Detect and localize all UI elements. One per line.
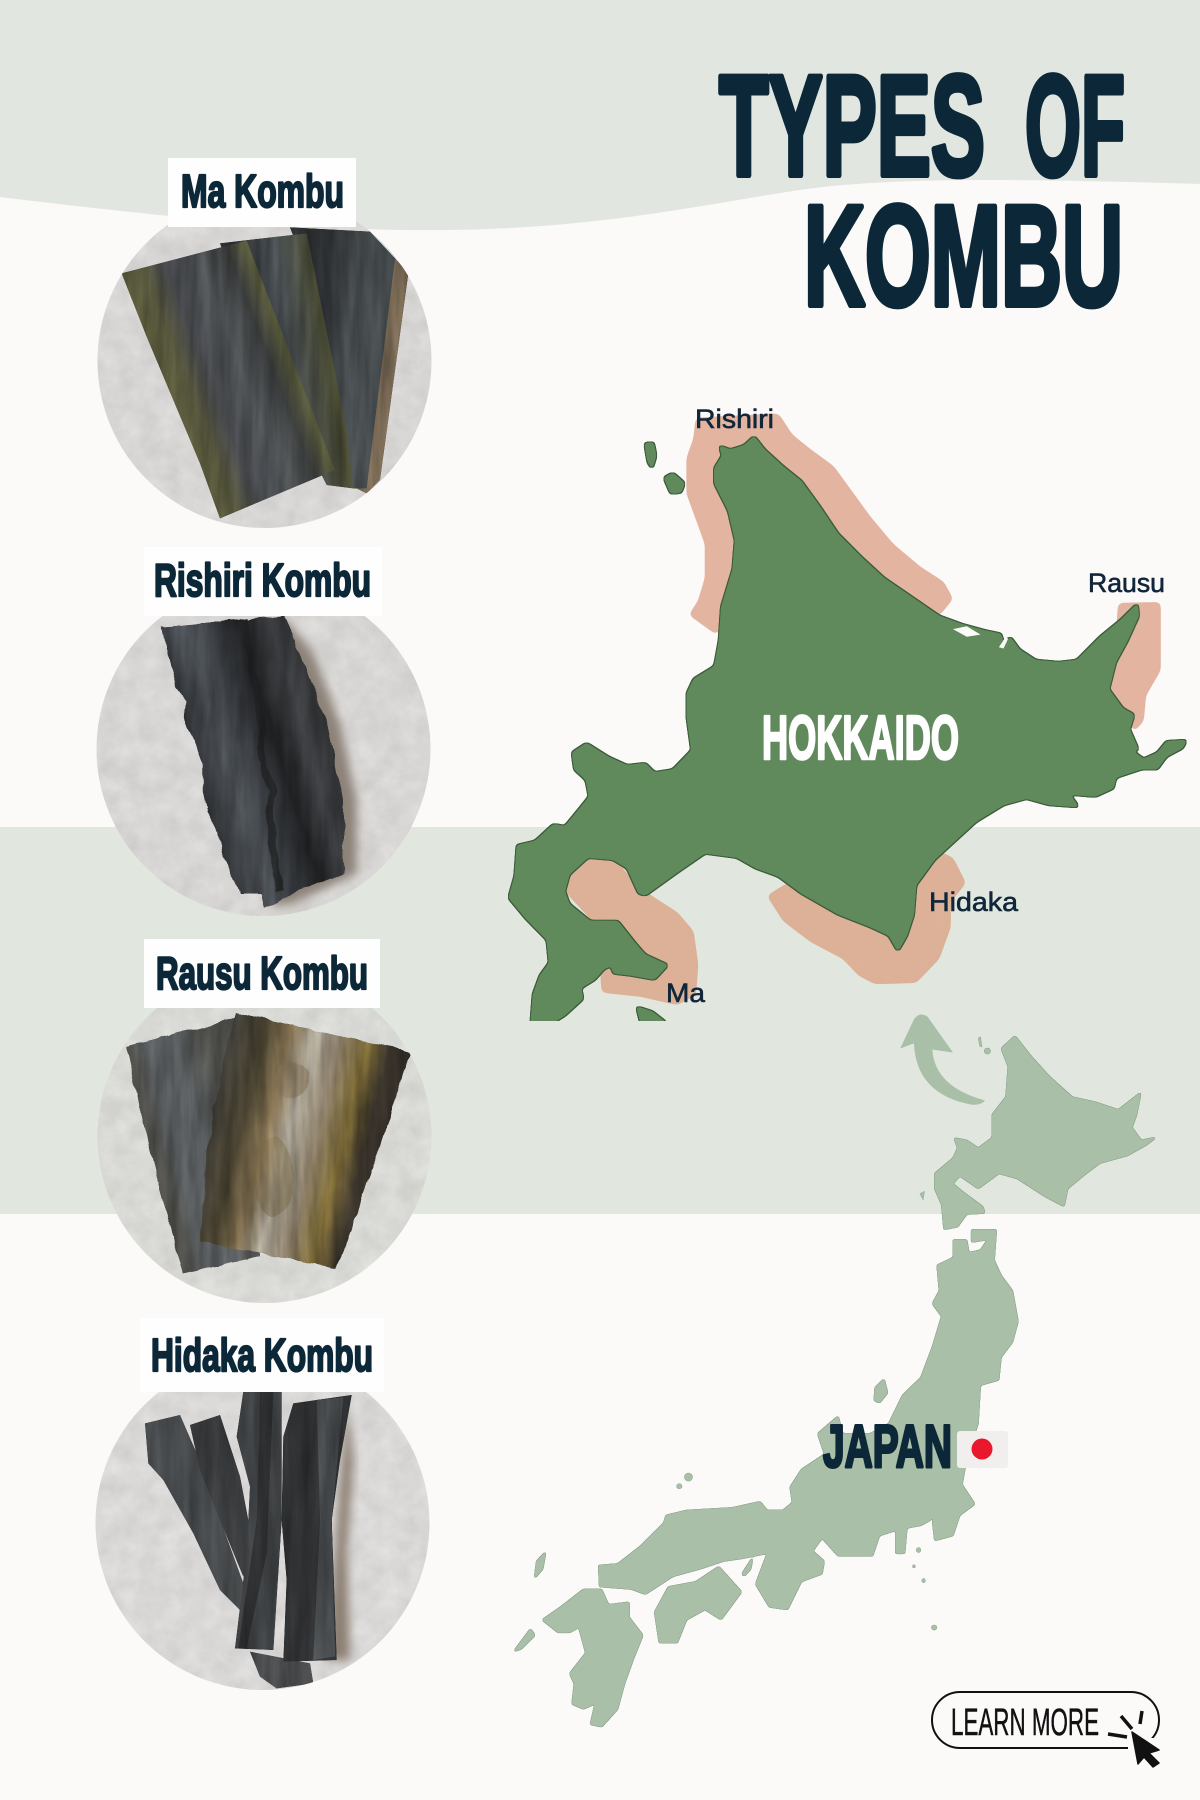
map label: Hidaka: Hidaka — [929, 887, 1019, 917]
label: Hidaka Kombu: Hidaka Kombu — [151, 1329, 373, 1381]
photo: Hidaka Kombu — [96, 1392, 430, 1690]
photo: Ma Kombu — [98, 222, 432, 528]
label: Ma Kombu: Ma Kombu — [181, 165, 344, 217]
label: JAPAN: JAPAN — [823, 1413, 952, 1480]
header wave band — [0, 0, 1200, 230]
lake notches — [953, 626, 1008, 649]
island mainland: Hokkaido — [508, 436, 1187, 1024]
map label: HOKKAIDO: HOKKAIDO — [762, 704, 959, 773]
map: Hokkaido detail — [500, 404, 1187, 1033]
label: Rishiri Kombu — [144, 547, 382, 616]
title: TYPES — [719, 47, 985, 206]
title — [719, 47, 1125, 336]
arrow: Japan to Hokkaido — [900, 1015, 985, 1105]
mask below Hokkaido crop — [500, 1021, 700, 1033]
photo: Rishiri Kombu — [96, 616, 430, 916]
region: Ma coast — [565, 858, 698, 1005]
map: Japan — [513, 1036, 1157, 1727]
region: Rausu coast — [1109, 602, 1161, 731]
map label: Ma: Ma — [666, 978, 706, 1008]
label: Rausu Kombu: Rausu Kombu — [156, 947, 368, 999]
icon: cursor with click marks — [1108, 1711, 1166, 1770]
label: Hidaka Kombu — [140, 1318, 384, 1392]
icon: Japanese flag — [957, 1431, 1008, 1468]
region: Rishiri coast — [687, 414, 953, 635]
small islands — [677, 1037, 991, 1630]
map label: Rausu: Rausu — [1088, 568, 1165, 598]
map label: Rishiri: Rishiri — [695, 404, 774, 434]
region: Hidaka coast — [767, 851, 966, 984]
label: Rausu Kombu — [144, 939, 380, 1008]
button: learn more: LEARN MORE — [951, 1702, 1099, 1744]
middle band — [0, 827, 1200, 1214]
button: learn more — [932, 1692, 1166, 1770]
label: Rishiri Kombu: Rishiri Kombu — [154, 554, 371, 606]
photo: Rausu Kombu — [98, 1008, 432, 1303]
label: Ma Kombu — [168, 158, 356, 227]
